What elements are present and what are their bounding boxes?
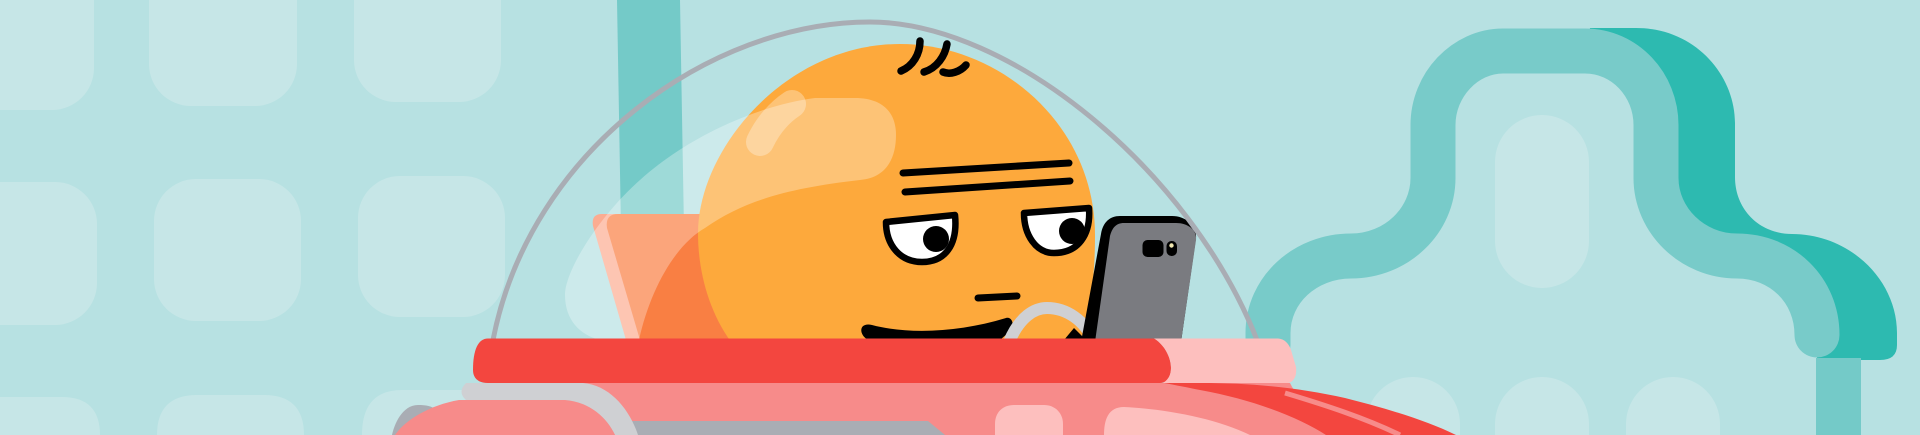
pink hood panel <box>1104 407 1250 435</box>
grey dashboard panel <box>625 421 945 435</box>
red windshield bar <box>473 338 1171 383</box>
fender salmon <box>395 400 615 435</box>
pink rear bar <box>1154 338 1296 383</box>
vertical teal pipe <box>617 0 684 230</box>
forehead wrinkles <box>903 163 1070 192</box>
hair <box>901 41 966 73</box>
phone body <box>1081 216 1196 342</box>
mouth <box>861 318 1013 340</box>
curved teal pipe <box>1268 51 1817 345</box>
glass reflection on dome <box>565 98 896 340</box>
arch band <box>462 383 638 435</box>
seat back <box>607 214 780 340</box>
phone <box>1081 216 1196 342</box>
character: orange driver <box>698 41 1095 342</box>
glare on head <box>760 104 792 142</box>
panel: car seat <box>593 214 780 340</box>
lower right teal pipe <box>1816 358 1861 435</box>
pink light <box>995 405 1063 435</box>
glass dome outline <box>493 22 1257 340</box>
nose <box>978 296 1017 298</box>
right eye <box>1024 208 1089 253</box>
phone back <box>1095 223 1196 342</box>
phone camera <box>1142 240 1177 257</box>
head <box>698 44 1095 342</box>
left eye <box>886 215 955 262</box>
curved teal pipe shadow <box>1585 28 1897 360</box>
panel: red car <box>392 338 1456 435</box>
fender shine <box>1285 393 1400 435</box>
red fender <box>1164 383 1456 435</box>
steering wheel <box>1009 308 1094 342</box>
car body <box>583 383 1348 435</box>
seat side edge <box>593 214 660 340</box>
grey wheel arch back <box>392 405 436 435</box>
